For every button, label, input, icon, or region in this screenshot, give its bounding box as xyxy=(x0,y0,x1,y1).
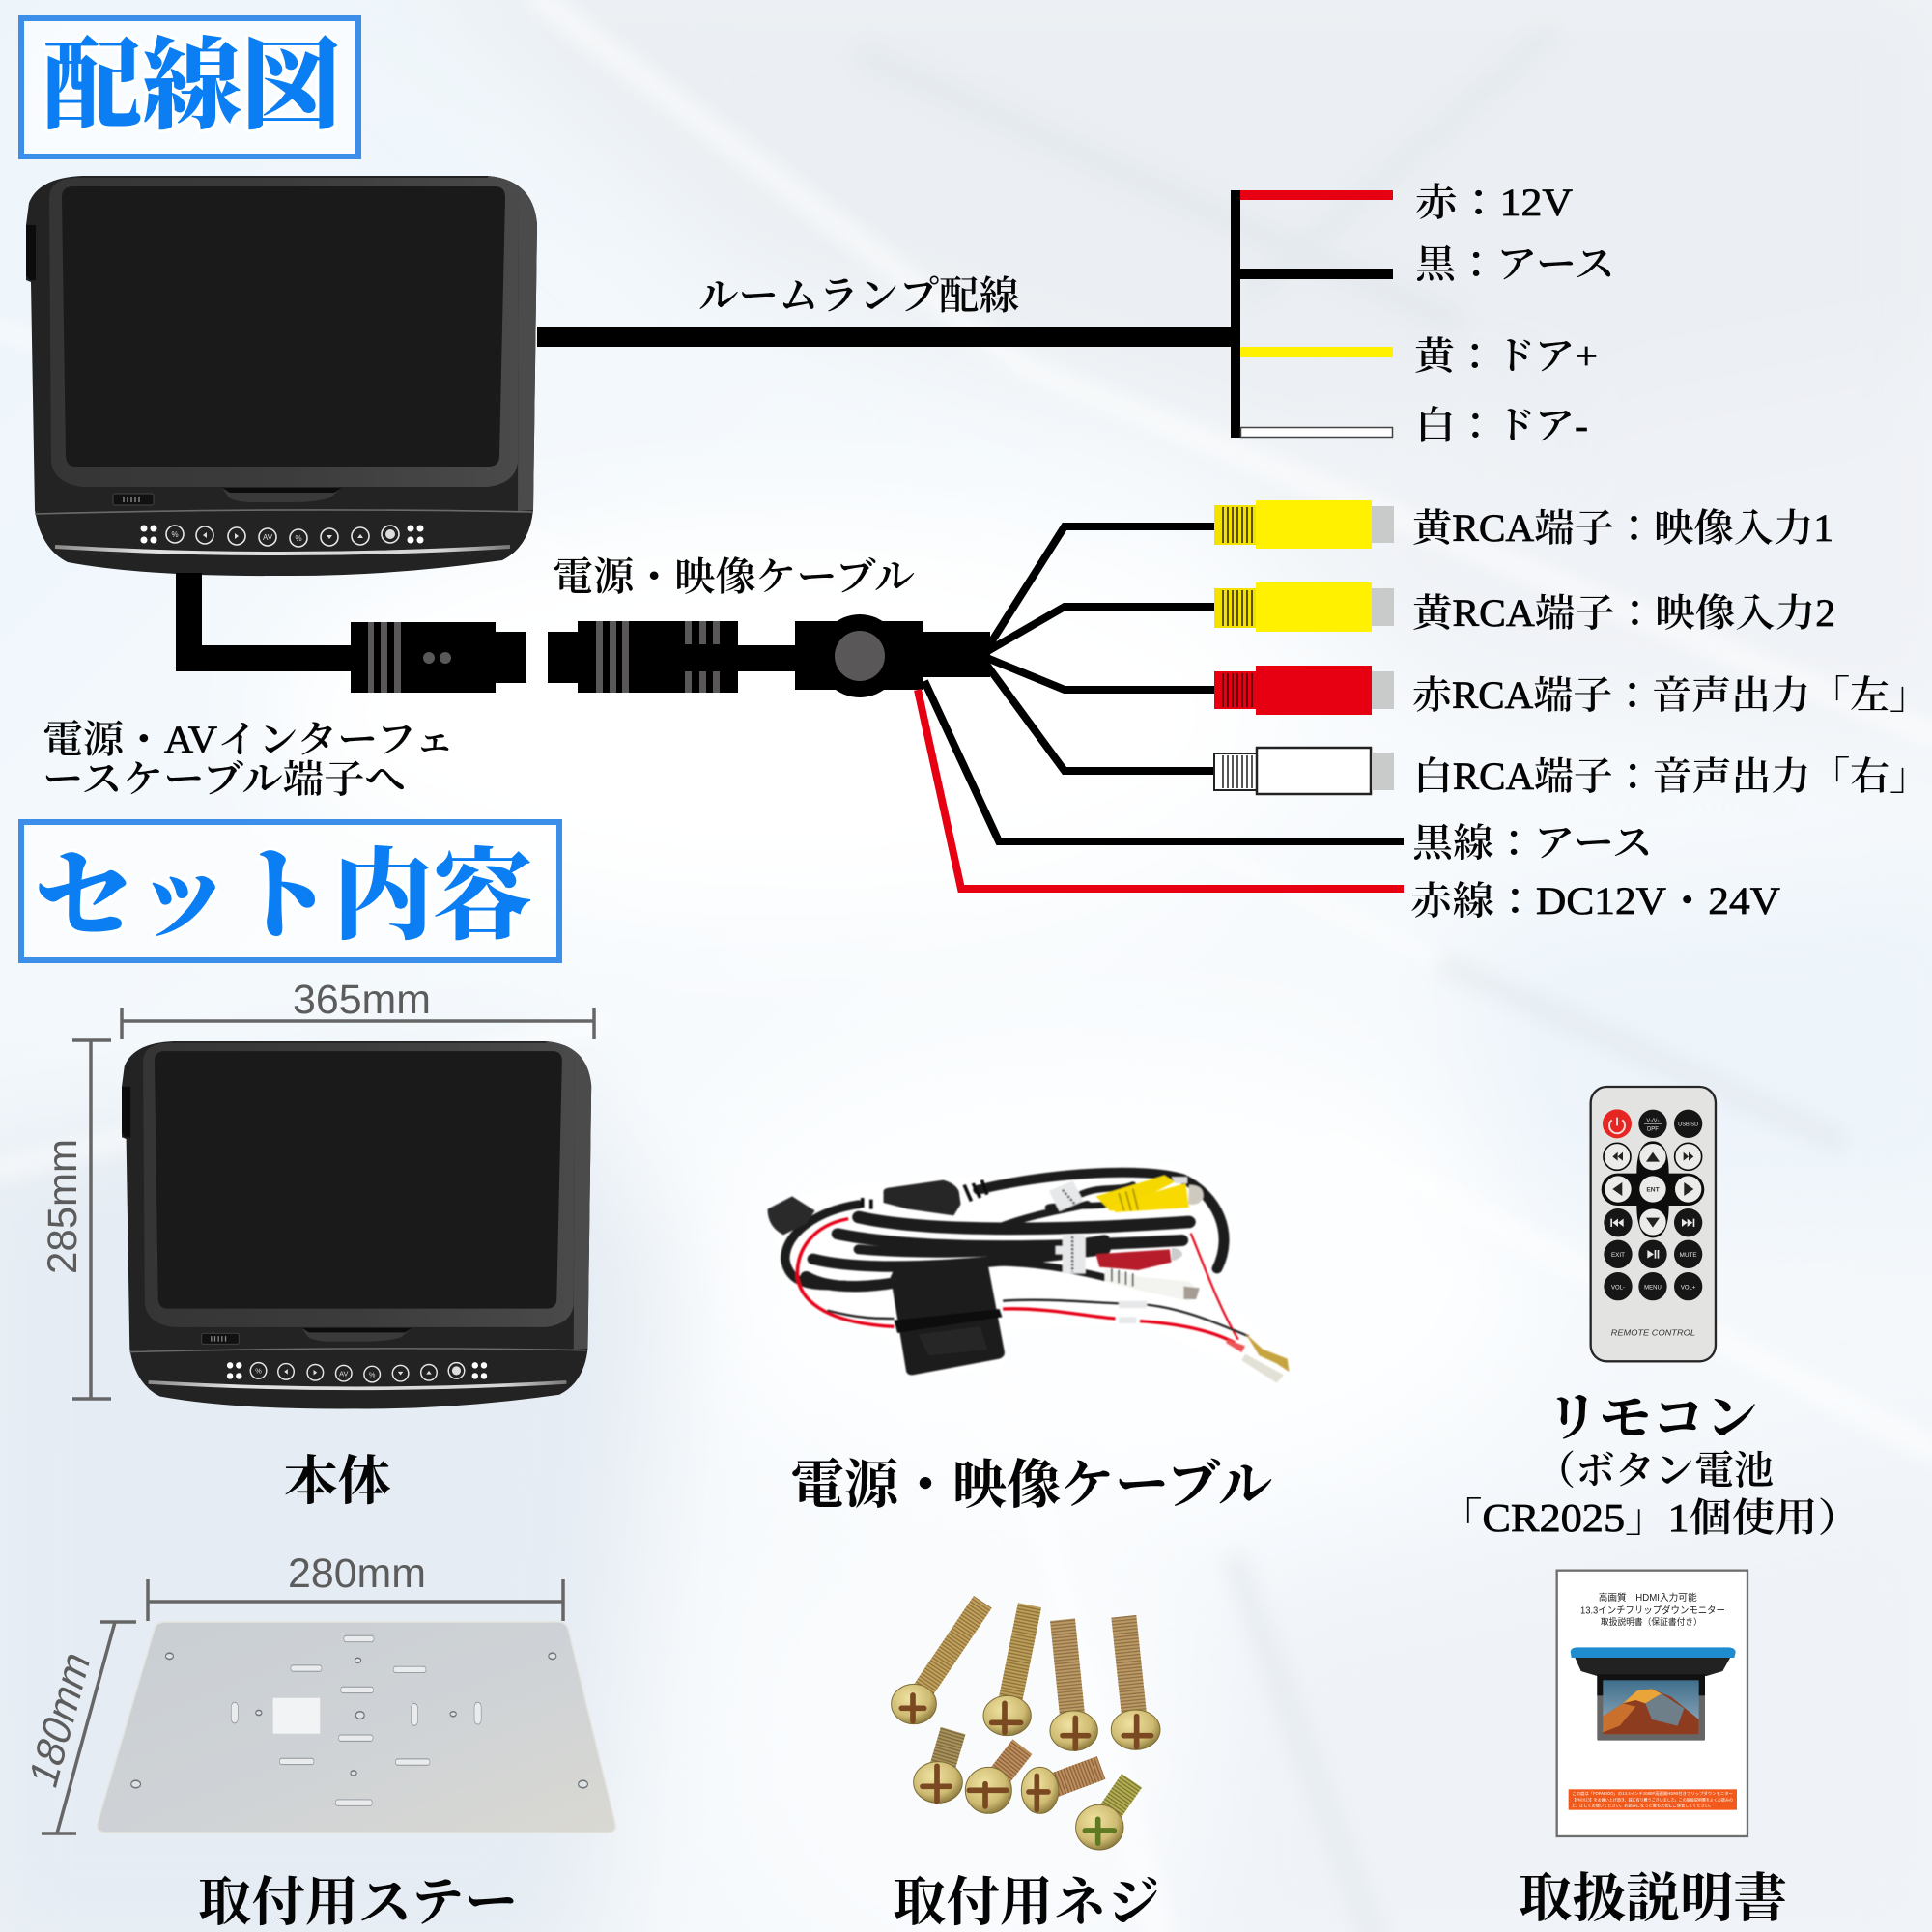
instruction manual: 上、正しくお使いください。お読みになった後も大切にご保管してください。 xyxy=(1572,1803,1713,1809)
title panel: 配線図: 配線図 xyxy=(43,32,341,142)
label: yellow RCA video 1: 黄RCA端子：映像入力1 xyxy=(1412,506,1833,550)
mounting screws xyxy=(892,1602,1160,1850)
label: CR2025 battery: 「CR2025 」1個使用） xyxy=(1439,1495,1861,1540)
remote control: ENT xyxy=(1646,1187,1660,1194)
room lamp harness xyxy=(537,190,1393,438)
dimension: height 285mm: 285mm xyxy=(40,1139,86,1274)
label: white door -: 白：ドア- xyxy=(1415,404,1588,447)
RCA connector: yellow 1 xyxy=(1214,500,1394,549)
label: instruction manual: 取扱説明書 xyxy=(1519,1869,1787,1928)
remote control: DPF xyxy=(1647,1127,1659,1133)
instruction manual: この度は「FOPARIOO」の13.3インチ1080P高画質HDMI付きフリップダウンモニター xyxy=(1572,1790,1733,1797)
label: red wire DC: 赤線： DC12V ・24V xyxy=(1410,879,1780,923)
label: red 12V: 赤：12V xyxy=(1415,181,1573,224)
instruction manual: 取扱説明書（保証書付き） xyxy=(1601,1616,1702,1627)
dimension: depth 180mm: 180mm xyxy=(22,1643,99,1796)
dimension: width 280mm xyxy=(148,1550,563,1621)
label: button battery: （ボタン電池 xyxy=(1536,1448,1774,1492)
instruction manual: 13.3インチフリップダウンモニター xyxy=(1580,1604,1725,1616)
instruction manual: 【PN1023】をお買い上げ頂き、誠に有り難うございました。この取扱説明書をよくお読みの xyxy=(1572,1796,1733,1803)
label: yellow door +: 黄：ドア+ xyxy=(1414,334,1598,378)
monitor: main unit xyxy=(122,1041,591,1408)
label: power video cable item: 電源・映像ケーブル xyxy=(790,1456,1272,1515)
dimension: height 285mm xyxy=(40,1040,111,1399)
title panel: セット内容: セット内容 xyxy=(34,842,532,952)
label: white RCA audio right: 白RCA端子：音声出力「右」 xyxy=(1413,754,1929,798)
remote control: MENU xyxy=(1644,1285,1662,1291)
remote control: VOL- xyxy=(1611,1285,1625,1291)
label: power video cable: 電源・映像ケーブル xyxy=(553,554,915,599)
label: main unit: 本体 xyxy=(284,1452,391,1511)
dimension: depth 180mm xyxy=(22,1622,136,1833)
remote control: REMOTE CONTROL xyxy=(1611,1327,1695,1337)
remote control: EXIT xyxy=(1611,1252,1625,1259)
remote control: USB/SD xyxy=(1678,1122,1698,1128)
RCA connector: white xyxy=(1214,748,1394,794)
remote control: VOL+ xyxy=(1681,1285,1696,1291)
dimension: width 365mm: 365mm xyxy=(293,977,431,1023)
mounting plate xyxy=(98,1622,615,1833)
remote control xyxy=(1591,1087,1716,1361)
label: to AV interface terminal: 電源・AVインターフェ xyxy=(43,718,455,761)
remote control: MUTE xyxy=(1680,1252,1697,1259)
power video cable photo xyxy=(768,1162,1291,1384)
RCA connector: red xyxy=(1214,666,1394,715)
label: yellow RCA video 2: 黄RCA端子：映像入力 2 xyxy=(1412,591,1835,635)
power and video cable with connectors xyxy=(176,573,990,697)
instruction manual: 高画質 HDMI入力可能 xyxy=(1599,1592,1697,1604)
monitor: wiring diagram unit xyxy=(26,176,537,576)
label: to AV interface terminal xyxy=(43,718,455,801)
label: to AV interface terminal: ースケーブル端子へ xyxy=(43,757,406,801)
dimension: width 280mm: 280mm xyxy=(288,1550,426,1597)
dimension: width 365mm xyxy=(122,977,594,1039)
RCA branch wires xyxy=(918,526,1404,889)
label: mounting stay: 取付用ステー xyxy=(198,1873,518,1932)
label: remote control: リモコン xyxy=(1546,1389,1758,1447)
RCA connector: yellow 2 xyxy=(1214,582,1394,632)
remote control: V₁/V₂ xyxy=(1646,1118,1660,1123)
label: room lamp wiring: ルームランプ配線 xyxy=(698,273,1019,318)
label: mounting screws: 取付用ネジ xyxy=(893,1873,1160,1932)
label: black wire ground: 黒線：アース xyxy=(1412,821,1653,865)
instruction manual xyxy=(1557,1571,1747,1836)
label: black ground: 黒：アース xyxy=(1415,242,1615,286)
label: red RCA audio left: 赤RCA端子：音声出力「左」 xyxy=(1412,673,1929,717)
